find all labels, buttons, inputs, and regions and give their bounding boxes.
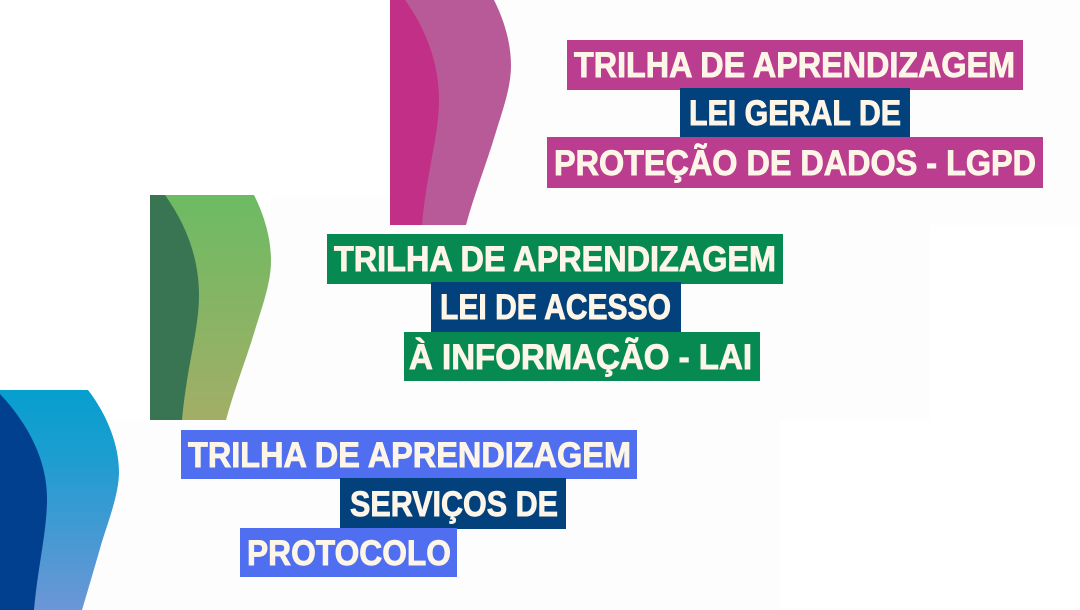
banner: trilha LGPD: TRILHA DE APRENDIZAGEM [574, 46, 1015, 85]
icon: blue wave light [0, 390, 119, 610]
icon: blue wave dark [0, 394, 47, 610]
icon: green wave light [150, 195, 271, 420]
banner: trilha LAI: TRILHA DE APRENDIZAGEM [334, 240, 776, 279]
banner: trilha serviços: TRILHA DE APRENDIZAGEM [188, 436, 631, 475]
banner: serviços de: SERVIÇOS DE [350, 485, 558, 524]
panel: LGPD [390, 0, 1080, 225]
icon: pink wave light [390, 0, 511, 225]
panel: LAI [150, 195, 930, 420]
banner: proteção de dados: PROTEÇÃO DE DADOS - LGPD [554, 144, 1036, 183]
banner: lei de acesso: LEI DE ACESSO [440, 288, 671, 327]
banner: à informação: À INFORMAÇÃO - LAI [409, 337, 752, 377]
banner: lei geral de [680, 88, 910, 139]
icon: green wave dark [150, 195, 199, 420]
banner: protocolo: PROTOCOLO [247, 534, 451, 573]
icon: pink wave dark [390, 0, 439, 225]
banner: serviços de [340, 478, 566, 529]
banner: lei de acesso [431, 282, 681, 333]
panel: Serviços de Protocolo [0, 390, 780, 610]
banner: lei geral de: LEI GERAL DE [689, 94, 901, 133]
